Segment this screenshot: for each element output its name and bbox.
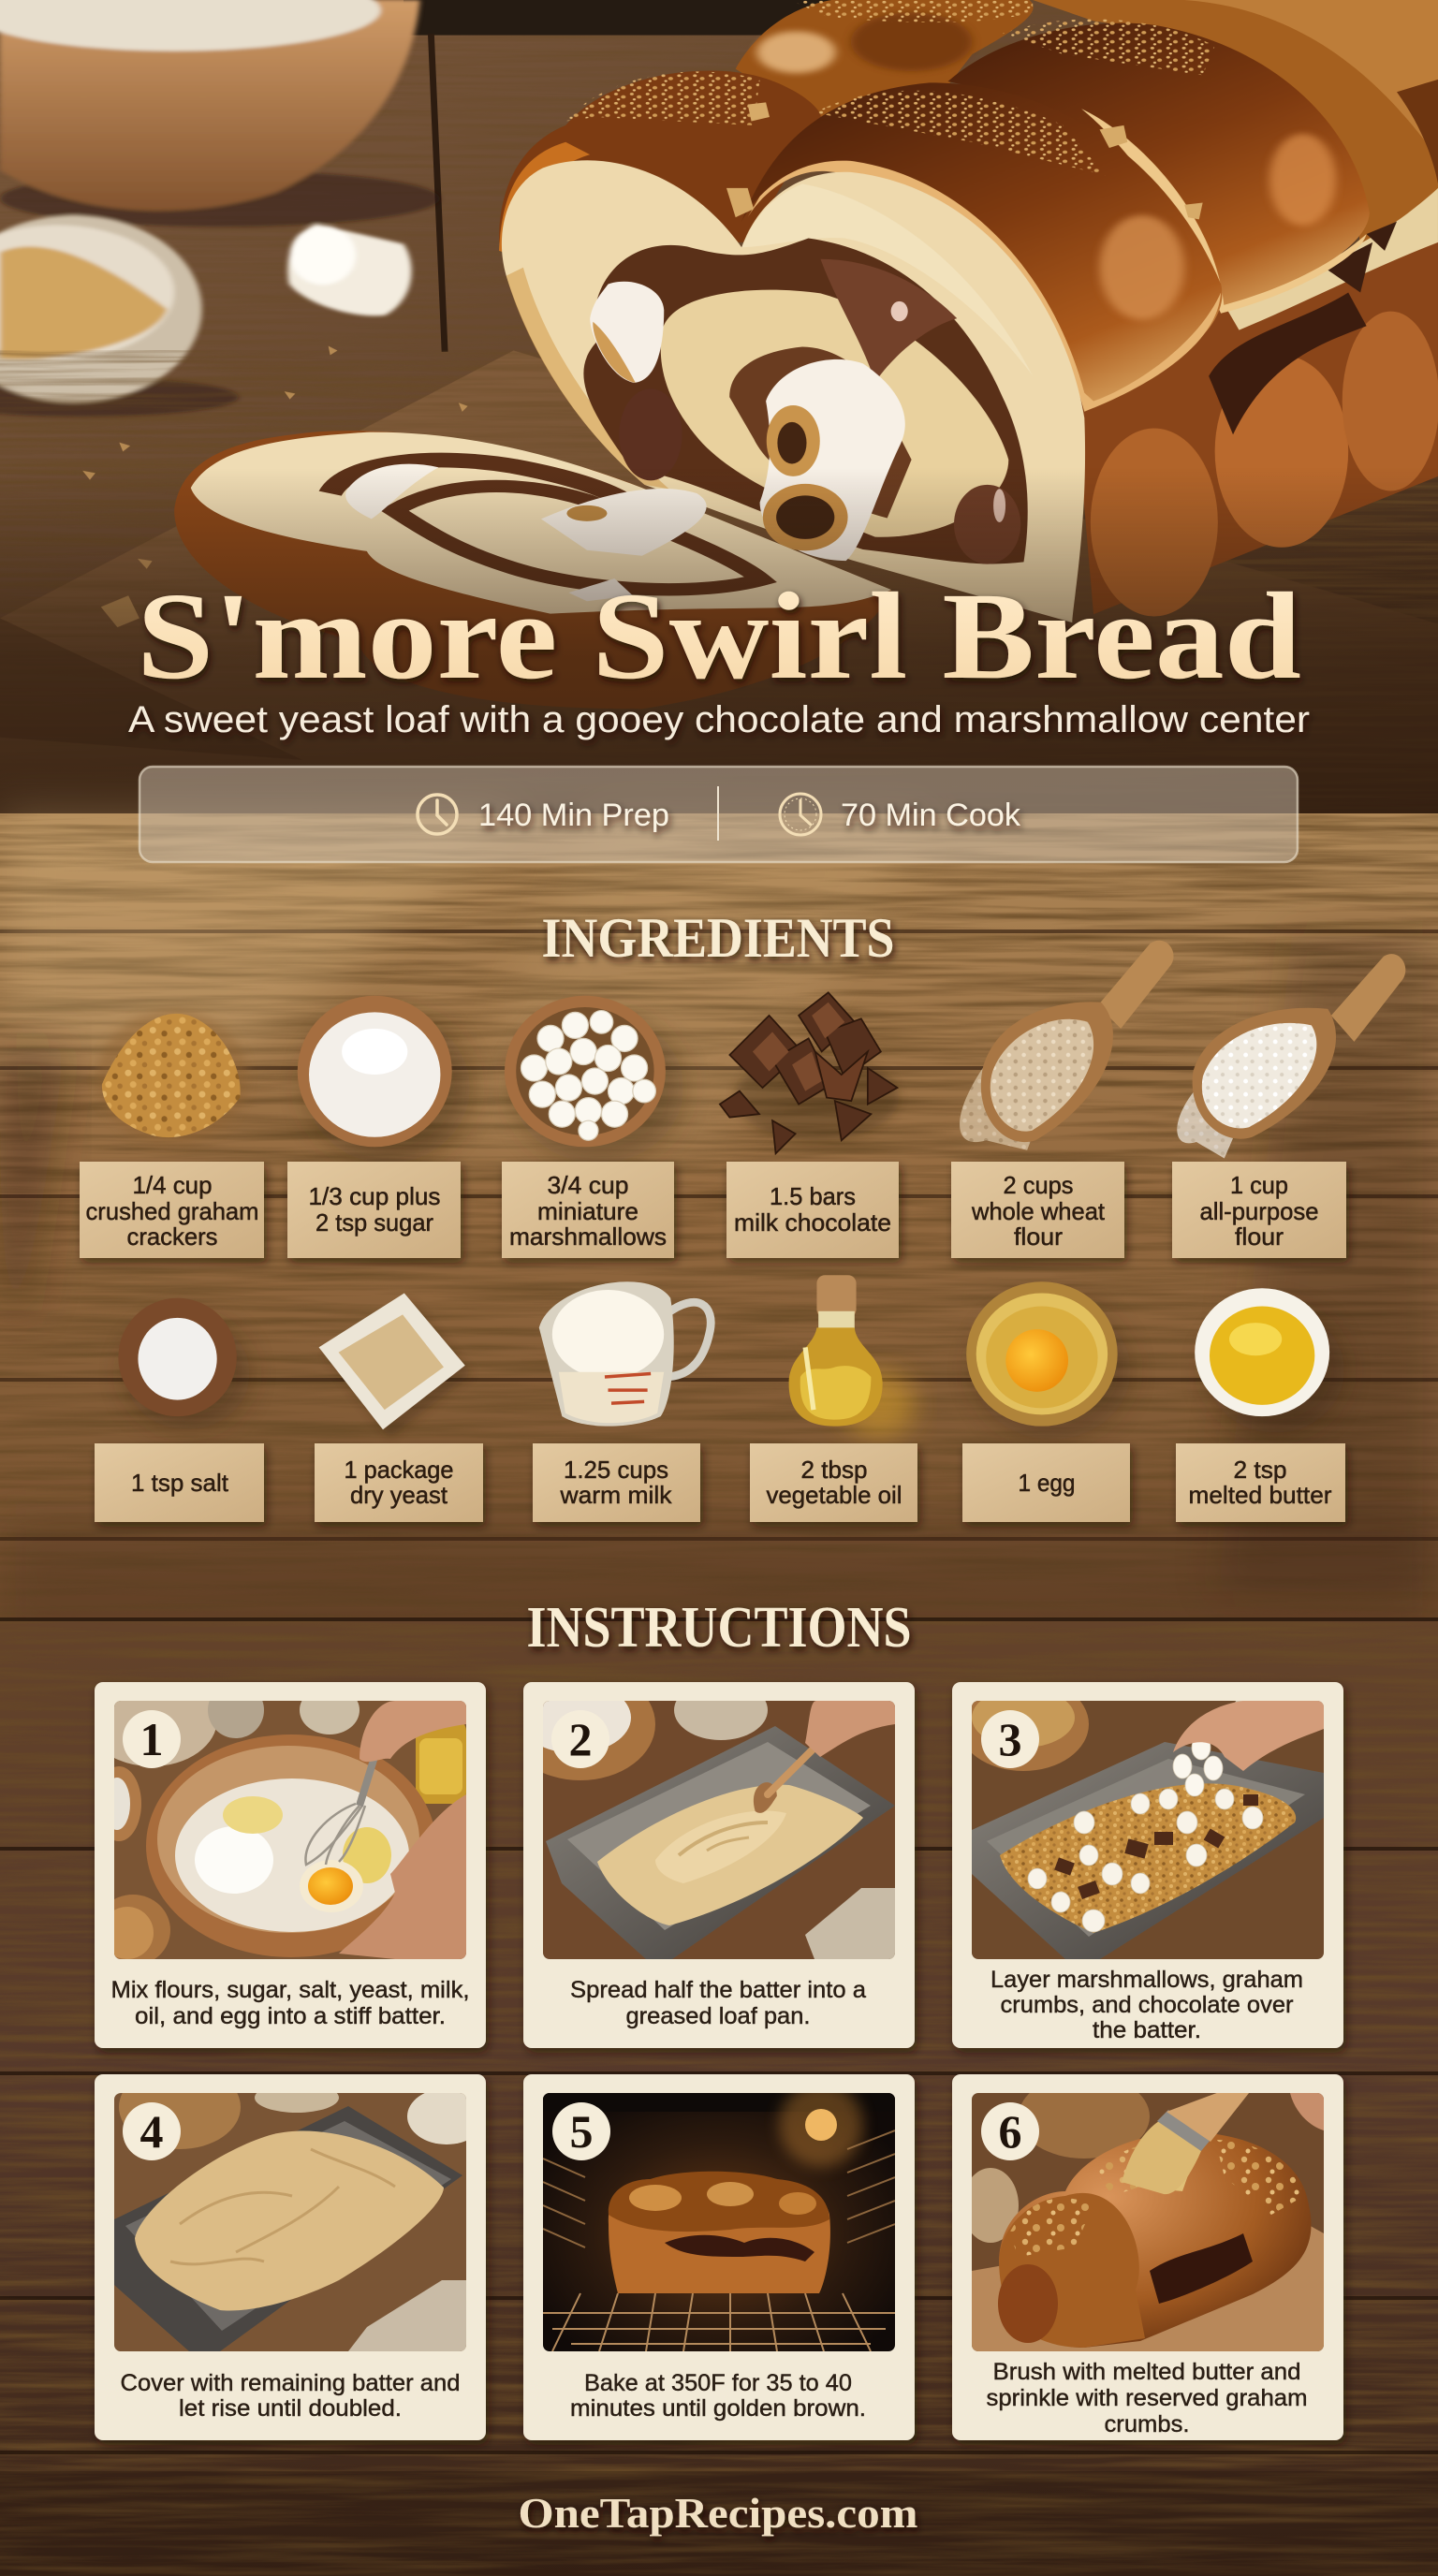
- label: egg: [962, 1443, 1130, 1522]
- label: marshmallows: 3/4 cup: [547, 1171, 629, 1199]
- label: marshmallows: miniature: [537, 1197, 638, 1225]
- step 4 caption: let rise until doubled.: [179, 2395, 402, 2422]
- ingredient labels row 1: [80, 1162, 1346, 1258]
- label: marshmallows: [502, 1162, 674, 1258]
- label: chocolate: [726, 1162, 899, 1258]
- icon: sugar bowl: [298, 996, 470, 1164]
- cut face: [502, 160, 1085, 622]
- step 4 caption: [120, 2370, 461, 2422]
- icon: egg in glass bowl: [966, 1281, 1131, 1440]
- step 2 photo: batter in pan: [506, 1668, 895, 1959]
- step 3 caption: [990, 1967, 1303, 2043]
- prep time clock icon: [418, 795, 457, 834]
- step 3 caption: crumbs, and chocolate over: [1000, 1992, 1294, 2018]
- icon: chocolate chunks: [720, 992, 899, 1153]
- step 1 caption: [110, 1977, 470, 2029]
- icon: whole wheat scoop: [960, 941, 1173, 1150]
- label: butter: melted butter: [1189, 1481, 1332, 1509]
- footer brand: OneTapRecipes.com: [519, 2489, 917, 2537]
- label: salt: 1 tsp salt: [131, 1469, 229, 1497]
- cook time: 70 Min Cook: [841, 798, 1021, 833]
- cutting board: [0, 350, 1438, 816]
- label: graham crackers: 1/4 cup: [133, 1171, 212, 1199]
- chocolate swirl: [583, 238, 1028, 564]
- label: whole wheat flour: 2 cups: [1004, 1171, 1073, 1199]
- number badge 6: 6: [998, 2105, 1022, 2158]
- number badge 5: 5: [569, 2105, 594, 2158]
- hero photo: loaf on cutting board: [0, 0, 1438, 816]
- label: yeast: 1 package: [345, 1456, 453, 1484]
- step 2 caption: [570, 1977, 866, 2029]
- label: egg: 1 egg: [1019, 1469, 1075, 1497]
- step card 2: [506, 1668, 915, 2048]
- step 6 photo: brushing loaf: [962, 2074, 1324, 2351]
- label: all-purpose flour: 1 cup: [1230, 1171, 1288, 1199]
- number badge 6: [981, 2102, 1039, 2160]
- number badge 3: 3: [998, 1713, 1022, 1765]
- icon: measuring cup: [539, 1281, 711, 1427]
- label: butter: [1176, 1443, 1345, 1522]
- table and blurred props: [0, 0, 1438, 816]
- label: sugar: 2 tsp sugar: [315, 1208, 433, 1237]
- number badge 2: 2: [569, 1713, 592, 1765]
- label: chocolate: milk chocolate: [734, 1208, 891, 1237]
- label: all-purpose flour: all-purpose: [1200, 1197, 1318, 1225]
- label: oil: 2 tbsp: [801, 1456, 867, 1484]
- number badge 2: [551, 1710, 609, 1768]
- loaf: [499, 0, 1438, 622]
- number badge 1: [123, 1710, 181, 1768]
- number badge 5: [552, 2102, 610, 2160]
- label: milk: 1.25 cups: [564, 1456, 668, 1484]
- label: whole wheat flour: flour: [1014, 1222, 1063, 1251]
- label: graham crackers: crushed graham: [86, 1197, 258, 1225]
- step card 4: [95, 2065, 486, 2440]
- label: milk: warm milk: [559, 1481, 673, 1509]
- middle bump: [947, 23, 1370, 309]
- number badge 4: 4: [140, 2105, 163, 2158]
- step card 3: [952, 1677, 1343, 2048]
- step 1 caption: oil, and egg into a stiff batter.: [135, 2003, 446, 2029]
- heading: instructions: INSTRUCTIONS: [526, 1596, 912, 1660]
- ingredient labels row 2: [95, 1443, 1345, 1522]
- step card 6: [952, 2074, 1343, 2440]
- front right crust: [741, 82, 1222, 407]
- step 3 caption: the batter.: [1093, 2017, 1201, 2043]
- label: graham crackers: [80, 1162, 264, 1258]
- icon: yeast packet: [319, 1293, 472, 1438]
- crumb clusters: [726, 102, 1203, 219]
- dark overlay: [0, 468, 1438, 813]
- icon: all-purpose scoop: [1177, 954, 1405, 1159]
- label: chocolate: 1.5 bars: [770, 1182, 856, 1210]
- step 4 photo: dough rising in pan: [114, 2065, 486, 2351]
- label: butter: 2 tsp: [1234, 1456, 1286, 1484]
- label: milk: [533, 1443, 700, 1522]
- label: graham crackers: crackers: [127, 1222, 217, 1251]
- icon: marshmallow bowl: [505, 996, 683, 1164]
- number badge 1: 1: [140, 1713, 163, 1765]
- ingredients wood background: [0, 813, 1438, 1637]
- title: S'more Swirl Bread: [137, 566, 1301, 705]
- icon: graham crumbs: [97, 1011, 248, 1146]
- icon: melted butter ramekin: [1195, 1288, 1344, 1433]
- step 5 caption: minutes until golden brown.: [570, 2395, 866, 2422]
- label: sugar: 1/3 cup plus: [309, 1182, 440, 1210]
- label: oil: vegetable oil: [766, 1481, 902, 1509]
- subtitle: A sweet yeast loaf with a gooey chocolate and marshmallow center: [128, 699, 1310, 740]
- front left crust: [499, 71, 821, 242]
- marshmallow drip: [760, 359, 905, 561]
- prep time: 140 Min Prep: [478, 798, 669, 833]
- heading: ingredients: INGREDIENTS: [541, 907, 895, 969]
- step 5 photo: loaf in oven: [543, 2083, 895, 2351]
- step 3 caption: Layer marshmallows, graham: [990, 1967, 1303, 1993]
- step 2 caption: greased loaf pan.: [625, 2003, 811, 2029]
- step 6 caption: crumbs.: [1105, 2411, 1189, 2437]
- loaf body side: [1076, 217, 1438, 614]
- icon: salt bowl: [118, 1298, 250, 1429]
- label: salt: [95, 1443, 264, 1522]
- cut slice: [174, 431, 891, 709]
- label: marshmallows: marshmallows: [509, 1222, 667, 1251]
- label: all-purpose flour: flour: [1235, 1222, 1284, 1251]
- step card 5: [523, 2074, 915, 2440]
- number badge 3: [981, 1710, 1039, 1768]
- step 6 caption: sprinkle with reserved graham: [987, 2385, 1307, 2411]
- step 4 caption: Cover with remaining batter and: [120, 2370, 461, 2396]
- label: oil: [750, 1443, 917, 1522]
- step 1 photo: mixing bowl: [114, 1701, 466, 1959]
- step 5 caption: Bake at 350F for 35 to 40: [584, 2370, 852, 2396]
- label: yeast: dry yeast: [350, 1481, 448, 1509]
- time panel: [139, 767, 1298, 862]
- icon: oil bottle: [789, 1275, 916, 1438]
- number badge 4: [123, 2102, 181, 2160]
- label: yeast: [315, 1443, 483, 1522]
- step 6 caption: [987, 2359, 1307, 2437]
- instructions wood background: [0, 1619, 1438, 2576]
- label: all-purpose flour: [1172, 1162, 1346, 1258]
- step 3 photo: layering marshmallows: [958, 1677, 1328, 1959]
- label: whole wheat flour: [951, 1162, 1124, 1258]
- label: whole wheat flour: whole wheat: [971, 1197, 1106, 1225]
- label: sugar: [287, 1162, 461, 1258]
- ingredient illustrations: [97, 941, 1405, 1440]
- step 6 caption: Brush with melted butter and: [992, 2359, 1301, 2385]
- step 5 caption: [570, 2370, 866, 2422]
- cook time clock icon: [780, 794, 821, 835]
- step card 1: [86, 1673, 486, 2048]
- step 1 caption: Mix flours, sugar, salt, yeast, milk,: [110, 1977, 470, 2003]
- step 2 caption: Spread half the batter into a: [570, 1977, 866, 2003]
